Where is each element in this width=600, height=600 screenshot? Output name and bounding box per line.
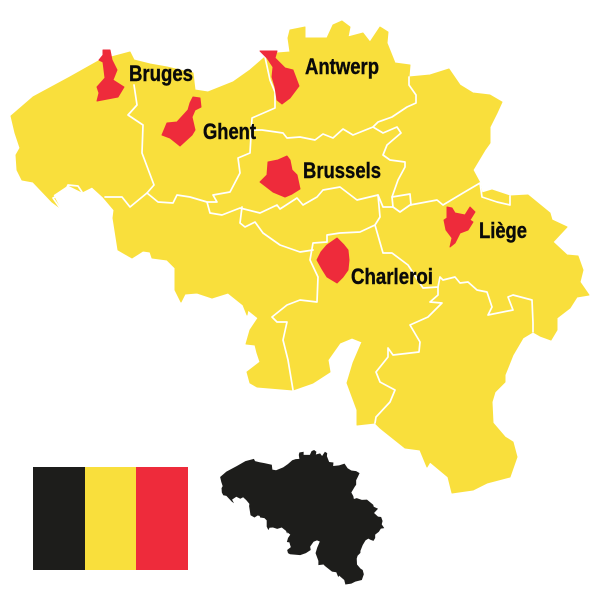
label: Charleroi: Charleroi	[351, 264, 433, 289]
country outline	[11, 21, 589, 493]
city area: Ghent	[162, 97, 201, 146]
label: Ghent: Ghent	[203, 119, 257, 144]
label: Bruges: Bruges	[129, 61, 193, 86]
label: Liège: Liège	[479, 218, 527, 243]
label: Brussels: Brussels	[303, 158, 381, 183]
city area: Antwerp	[260, 51, 299, 104]
city area: Charleroi	[317, 238, 349, 283]
label: Antwerp: Antwerp	[305, 54, 379, 79]
city area: Brussels	[260, 156, 300, 197]
city area: Bruges	[97, 50, 124, 101]
black silhouette of Belgium	[220, 450, 384, 585]
province borders	[53, 57, 533, 423]
flag of Belgium	[33, 467, 188, 570]
map of Belgium with provinces and cities	[11, 21, 589, 493]
city area: Liège	[444, 207, 475, 247]
